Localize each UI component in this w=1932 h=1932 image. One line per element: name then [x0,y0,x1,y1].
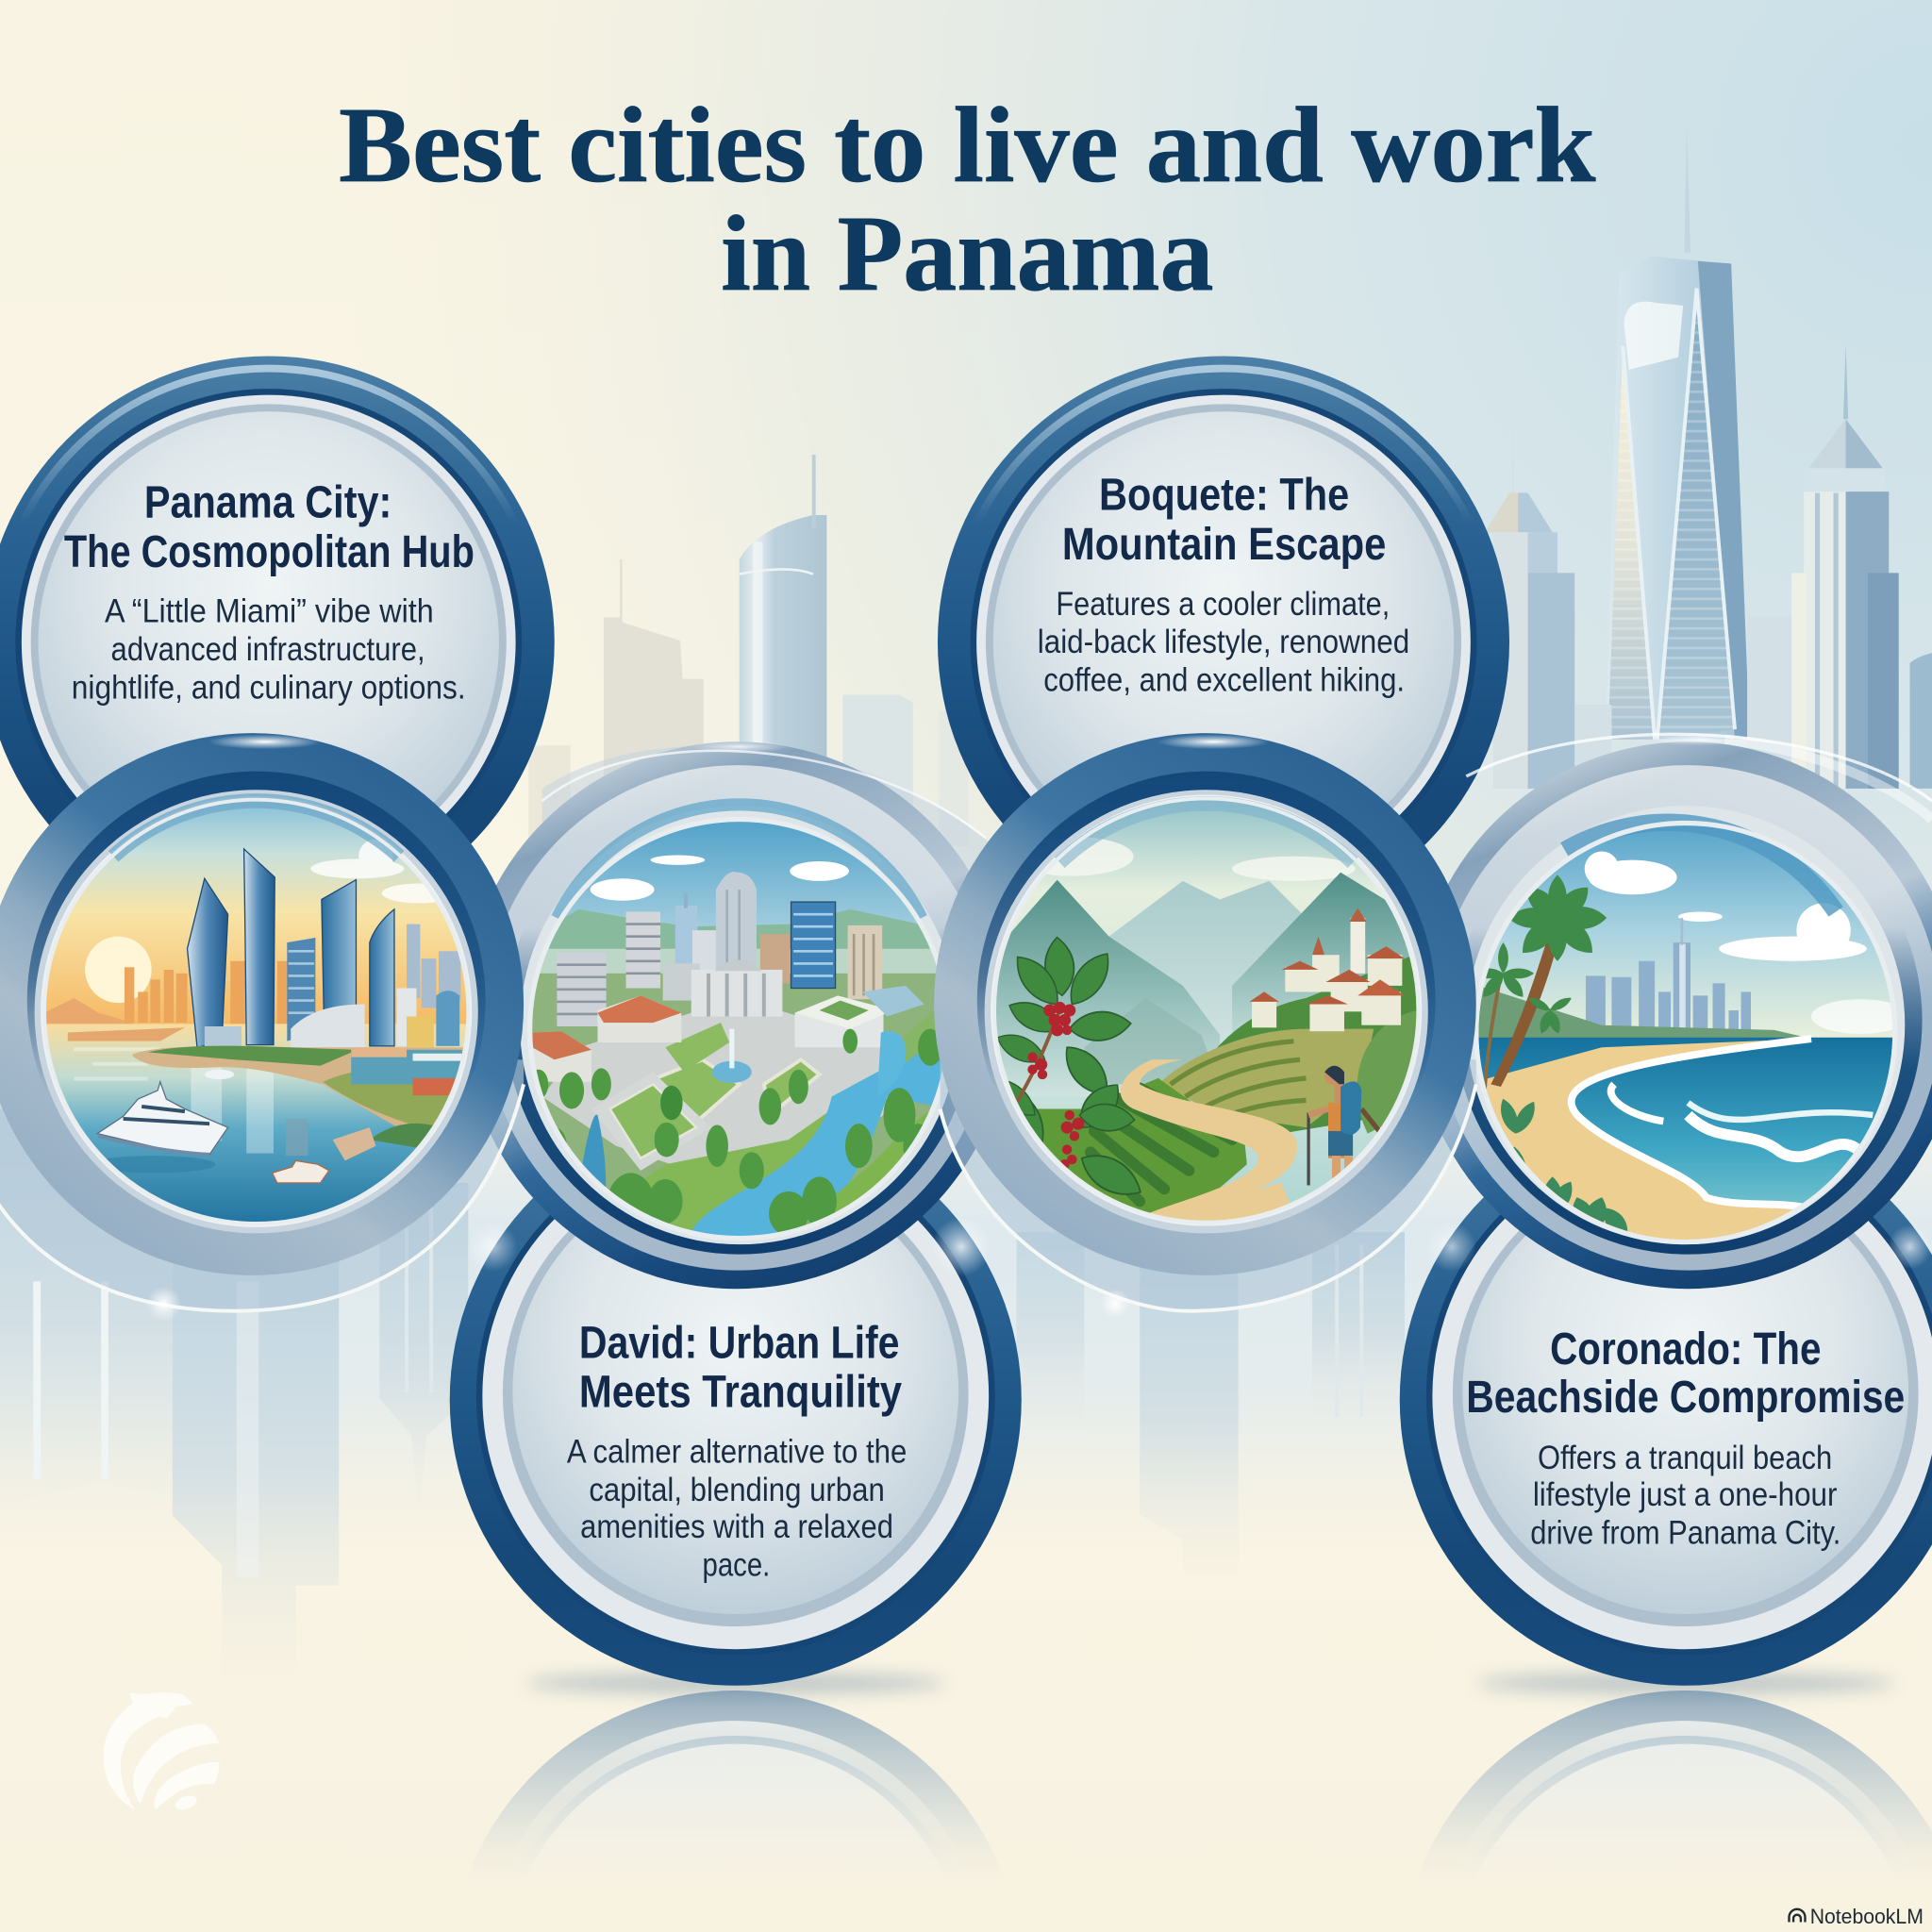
body text: A calmer alternative to the [567,1433,907,1470]
lower green bank and river [645,1113,826,1230]
heading: David: Urban Life [579,1317,899,1368]
body text [567,1433,907,1584]
heading: Coronado: The [1550,1324,1821,1374]
field and path [1038,1077,1247,1213]
body text: nightlife, and culinary options. [72,670,466,707]
heading: Meets Tranquility [579,1367,902,1418]
illustration: Boquete coffee hills and hiker [996,800,1417,1221]
heading [1062,470,1386,570]
heading: The Cosmopolitan Hub [64,526,475,577]
terraced hill [1217,957,1417,1132]
yacht [97,1082,228,1155]
body text [1530,1440,1840,1552]
body text: lifestyle just a one-hour [1533,1476,1838,1513]
small boats [273,1160,329,1183]
panel: Panama City text circle [0,356,555,928]
panel: Boquete text circle [938,356,1509,928]
bottom reflection: David [460,1674,1010,1897]
heading [579,1317,902,1418]
heading: Panama City: [144,477,391,528]
body text: Features a cooler climate, [1056,586,1390,623]
bottom reflection: Coronado [1411,1674,1932,1897]
palms [1483,875,1628,1231]
heading [1466,1324,1905,1423]
heading: Boquete: The [1099,470,1349,521]
body text: amenities with a relaxed [580,1508,893,1545]
centre-left faded towers [528,455,969,846]
village [1249,908,1405,1031]
body text: coffee, and excellent hiking. [1043,662,1405,699]
image ring: Coronado beach [1414,741,1932,1289]
body text [72,593,466,707]
body text: laid-back lifestyle, renowned [1038,624,1409,660]
body text [1038,586,1409,699]
image ring: David city [463,741,1010,1289]
lower reflected towers [0,1109,1405,1675]
coffee plant [985,936,1148,1206]
body text: Offers a tranquil beach [1538,1440,1832,1476]
panel: David text circle [450,1114,1022,1686]
illustration: Coronado beach, palms and skyline [1479,825,1892,1240]
specular flares and glass swooshes [146,733,1932,1321]
icon: NotebookLM [1789,1909,1805,1923]
logo: dolphin [104,1692,219,1812]
footer: NotebookLM mark: NotebookLM [1810,1905,1924,1928]
body text: drive from Panama City. [1530,1515,1840,1552]
image ring: Boquete mountains [934,733,1476,1311]
panel: Coronado text circle [1400,1114,1932,1686]
body text: capital, blending urban [589,1472,885,1508]
shoreline [132,1046,463,1126]
hiker [1308,1066,1361,1185]
body text: advanced infrastructure, [111,631,425,668]
title: Best cities to live and work [339,85,1596,205]
image ring: Panama City [0,733,524,1311]
illustration: David city plaza and river [532,822,941,1236]
illustration: Panama City skyline and marina [37,794,480,1233]
heading: Mountain Escape [1062,519,1386,570]
title: in Panama [721,193,1214,313]
heading [64,477,475,577]
body text: A “Little Miami” vibe with [105,593,434,630]
title [339,85,1596,313]
right stepped tower [1791,345,1899,789]
main glass tower [1606,125,1750,740]
ground and roads [543,1011,888,1164]
body text: pace. [702,1547,770,1584]
left stepped tower [1485,410,1932,789]
trees [528,1029,942,1242]
